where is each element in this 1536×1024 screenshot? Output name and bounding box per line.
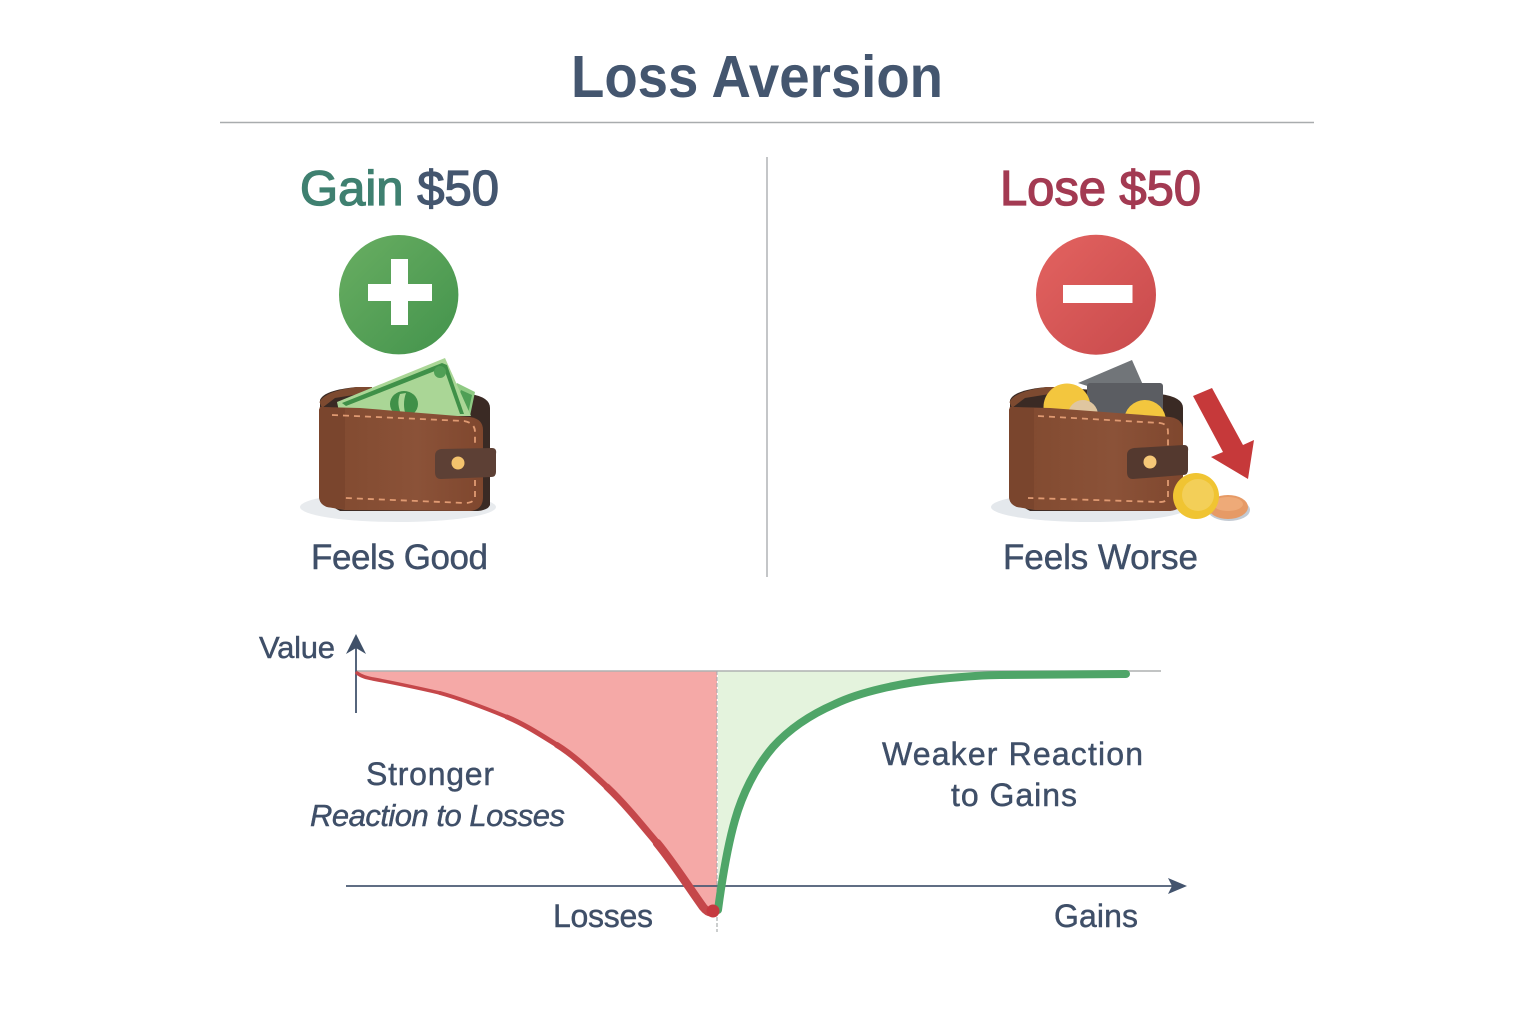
heading: Gain $50: Gain $50 bbox=[300, 162, 499, 216]
caption: Feels Worse: Feels Worse bbox=[1003, 538, 1198, 577]
icon: minus circle bbox=[1036, 235, 1156, 355]
icon: wallet with coins bbox=[991, 360, 1189, 522]
label: weaker reaction bbox=[882, 736, 1143, 813]
icon: dropped coins bbox=[1173, 473, 1250, 521]
icon: down arrow bbox=[1193, 388, 1254, 479]
panel: gain bbox=[300, 162, 499, 577]
x axis arrow bbox=[346, 878, 1187, 894]
heading: Lose $50: Lose $50 bbox=[1000, 162, 1201, 216]
label: Gains: Gains bbox=[1054, 898, 1138, 934]
panel: loss bbox=[991, 162, 1254, 577]
label: Losses: Losses bbox=[553, 898, 653, 934]
area: losses bbox=[357, 671, 717, 912]
chart: value curve bbox=[259, 630, 1187, 934]
area: gains bbox=[718, 671, 1000, 910]
curve: gains bbox=[718, 674, 1126, 910]
caption: Feels Good: Feels Good bbox=[311, 538, 488, 577]
y axis arrow bbox=[346, 634, 366, 713]
curve: losses bbox=[357, 673, 720, 918]
label: weaker reaction: to Gains bbox=[951, 777, 1077, 813]
icon: wallet with cash bbox=[300, 358, 496, 522]
label: Value: Value bbox=[259, 630, 335, 665]
label: stronger reaction: Stronger bbox=[366, 756, 494, 792]
label: stronger reaction bbox=[310, 756, 565, 833]
label: weaker reaction: Weaker Reaction bbox=[882, 736, 1143, 772]
title: Loss Aversion bbox=[571, 44, 943, 110]
label: stronger reaction: Reaction to Losses bbox=[310, 798, 565, 833]
icon: plus circle bbox=[339, 235, 458, 354]
